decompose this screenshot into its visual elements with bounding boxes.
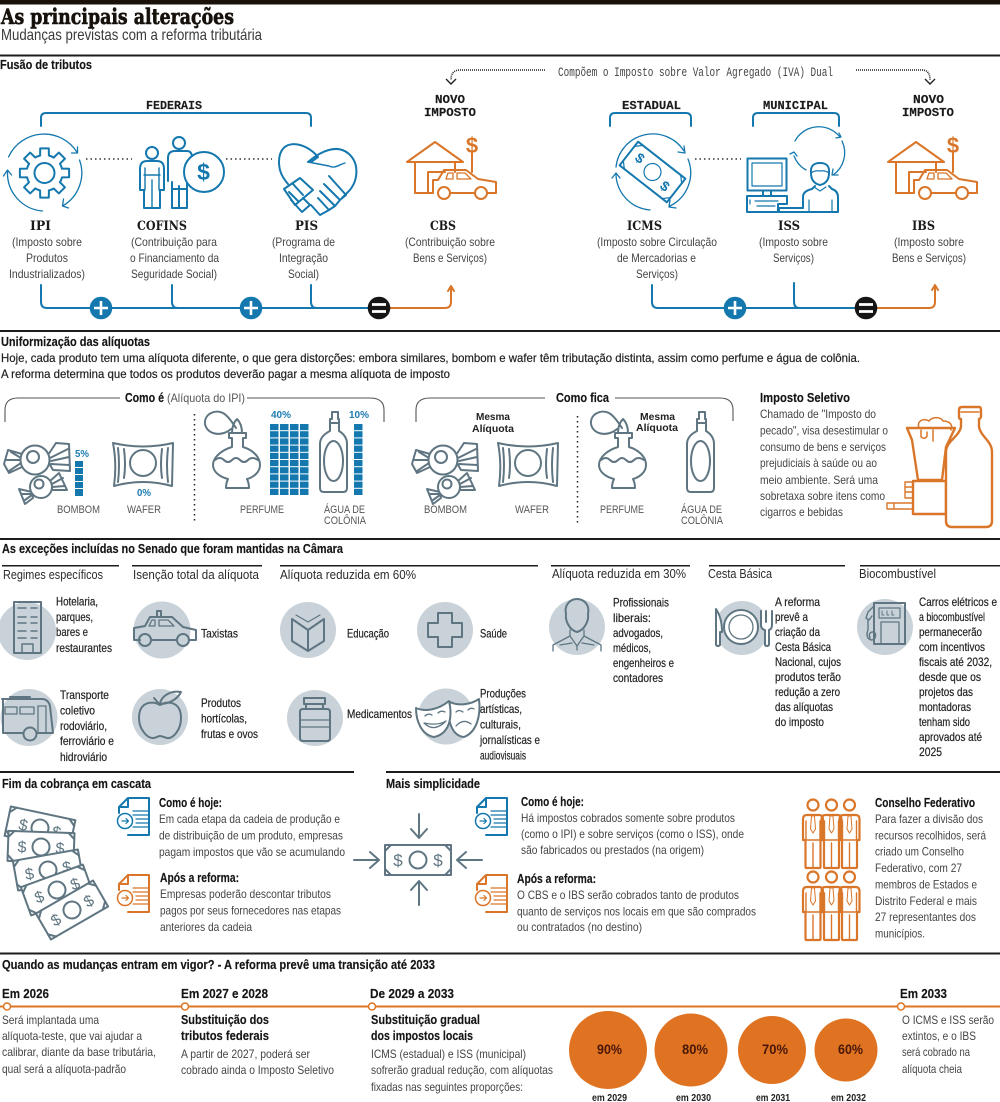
column: biocombustível <box>857 565 1000 759</box>
icon: fuel pump <box>866 603 905 644</box>
callout: IVA Dual with dotted arrows: Compõem o Imposto sobre Valor Agregado (IVA) Dual <box>558 66 833 80</box>
text: imposto seletivo: prejudiciais à saúde ou ao <box>760 456 877 470</box>
text: conselho federativo: Conselho Federativo <box>875 796 975 810</box>
text: produções <box>479 686 540 762</box>
text: imposto seletivo: cigarros e bebidas <box>760 505 843 519</box>
text: transporte: coletivo <box>60 704 95 718</box>
label: novo imposto CBS: IMPOSTO <box>424 106 476 120</box>
icon: wafer <box>113 443 173 486</box>
text: imposto seletivo <box>760 391 888 519</box>
text: biocombustível <box>919 595 997 759</box>
label: CBS: CBS <box>430 219 456 234</box>
text: educação: Educação <box>347 626 389 640</box>
text: conselho federativo: Distrito Federal e mais <box>875 894 977 908</box>
text: cesta básica: A reforma <box>775 595 820 609</box>
text: como é hoje: de distribuição de um produto, empresas <box>159 828 343 842</box>
icon: hotel building <box>14 602 41 653</box>
label: água de colônia como fica: ÁGUA DE <box>681 503 722 516</box>
panel: mais simplicidade <box>354 771 1000 940</box>
icon: heart handshake <box>279 144 356 215</box>
text: cesta básica: das alíquotas <box>775 700 833 714</box>
label: CBS <box>405 219 495 265</box>
label: novo imposto IBS: NOVO <box>913 93 944 107</box>
icon: wafer como fica <box>498 443 558 486</box>
label: CBS: Bens e Serviços) <box>413 251 487 265</box>
callout: IVA Dual with dotted arrows <box>446 66 935 84</box>
bracket: como é: Como é <box>125 391 164 405</box>
label: PIS: (Programa de <box>272 235 335 249</box>
icon: people with coin <box>140 137 224 208</box>
circle: 60% em 2032: 60% <box>838 1042 863 1057</box>
column: alíquota reduzida em 60%: Alíquota reduzida em 60% <box>280 567 416 582</box>
circle: 80% em 2030 <box>654 1014 728 1102</box>
panel: fim da cobrança em cascata <box>0 771 354 939</box>
label: PIS: PIS <box>295 219 318 234</box>
label: novo imposto CBS: NOVO <box>435 93 465 107</box>
icon: água de colônia como fica <box>687 412 714 492</box>
column: cesta básica <box>708 565 845 729</box>
panel: cronograma <box>0 958 1000 1102</box>
subtitle: Mudanças previstas com a reforma tributária <box>1 27 262 44</box>
step: de 2029 a 2033: De 2029 a 2033 <box>370 987 454 1001</box>
icon: stack of banknotes: $ <box>55 841 65 858</box>
bar: bombom 5% <box>75 448 90 496</box>
intro text: Hoje, cada produto tem uma alíquota diferente, o que gera distorções: embora similares, bombom e wafer têm tributação distinta, assim como perfume e água de colônia. <box>1 351 860 365</box>
text: transporte: hidroviário <box>60 750 107 764</box>
step: em 2026 <box>2 987 156 1076</box>
icon: blue document <box>118 798 149 835</box>
text: cesta básica: produtos terão <box>775 670 841 684</box>
text: como é hoje: (como o IPI) e sobre serviços (como o ISS), onde <box>521 827 744 841</box>
column: regimes específicos <box>0 565 119 764</box>
label: mesma alíquota direita: Alíquota <box>636 422 678 434</box>
step: de 2029 a 2033: Substituição gradual <box>371 1013 480 1027</box>
bar: água de colônia 10%: 10% <box>349 409 370 421</box>
label: ICMS: de Mercadorias e <box>617 251 696 265</box>
icon: stack of banknotes: $ <box>24 866 36 884</box>
label: COFINS: (Contribuição para <box>131 235 217 249</box>
label: mesma alíquota esquerda: Alíquota <box>472 423 514 435</box>
group: estadual bracket: ESTADUAL <box>622 99 681 113</box>
step: em 2027 e 2028: Substituição dos <box>181 1013 269 1027</box>
text: profissionais liberais: Profissionais <box>613 596 669 610</box>
icon: blue document <box>476 798 507 835</box>
text: como é hoje: são fabricados ou prestados (na origem) <box>521 843 704 857</box>
text: cesta básica: redução a zero <box>775 685 840 699</box>
label: ISS: ISS <box>778 219 800 234</box>
text: produtos hortícolas: Produtos <box>201 696 241 710</box>
text: cesta básica: prevê a <box>775 610 808 624</box>
text: transporte: Transporte <box>60 688 109 702</box>
text: profissionais liberais: advogados, <box>613 626 663 640</box>
step: em 2027 e 2028: Em 2027 e 2028 <box>181 987 268 1001</box>
icon: dollar on coin: $ <box>197 159 210 185</box>
text: cesta básica: criação da <box>775 625 820 639</box>
step: em 2027 e 2028: A partir de 2027, poderá ser <box>181 1047 310 1061</box>
text: cesta básica <box>775 595 841 729</box>
title: As principais alterações <box>0 4 234 29</box>
icon: stack of banknotes <box>5 806 108 939</box>
text: produções: culturais, <box>480 718 521 732</box>
step: em 2033: alíquota cheia <box>902 1062 962 1076</box>
label: novo imposto CBS <box>424 93 476 120</box>
text: imposto seletivo: consumo de bens e serviços <box>760 440 886 454</box>
label: wafer: WAFER <box>127 504 161 516</box>
text: produtos hortícolas <box>201 696 258 741</box>
icon: medicine bottle <box>300 698 330 741</box>
label: IPI <box>9 219 85 281</box>
label: IBS: IBS <box>912 219 935 234</box>
icon: banknote with converging arrows <box>354 814 482 905</box>
label: COFINS <box>130 219 219 281</box>
text: cesta básica: Nacional, cujos <box>775 655 841 669</box>
icon: bebida e cigarro <box>887 407 992 527</box>
icon: bombom <box>4 443 70 504</box>
column: isenção total <box>132 565 262 745</box>
label: wafer 0%: 0% <box>137 487 152 499</box>
text: após a reforma: pagos por seus fornecedores nas etapas <box>160 904 341 918</box>
icon: bombom como fica <box>412 443 478 504</box>
icon: IBS house and car <box>888 142 977 199</box>
text: cesta básica: Cesta Básica <box>775 640 831 654</box>
circle: 60% em 2032 <box>814 1018 878 1102</box>
step: em 2027 e 2028: tributos federais <box>181 1029 269 1043</box>
circle: 70% em 2031 <box>738 1016 806 1102</box>
group: federais bracket <box>41 99 311 126</box>
column: isenção total: Isenção total da alíquota <box>133 567 260 582</box>
icon: cross <box>428 613 462 647</box>
icon: rotating banknote <box>612 134 691 210</box>
text: hotelaria: bares e <box>56 625 88 639</box>
icon: apple <box>139 692 181 738</box>
text: hotelaria: restaurantes <box>56 641 112 655</box>
icon: book <box>292 615 324 651</box>
label: ICMS: (Imposto sobre Circulação <box>597 235 717 249</box>
label: COFINS: Seguridade Social) <box>131 267 217 281</box>
text: produtos hortícolas: frutas e ovos <box>201 727 258 741</box>
text: profissionais liberais: liberais: <box>613 611 651 625</box>
label: PIS: Integração <box>279 251 328 265</box>
label: IPI: Industrializados) <box>9 267 85 281</box>
step: em 2026: Será implantada uma <box>2 1013 99 1027</box>
group: estadual bracket <box>610 99 691 126</box>
text: imposto seletivo: meio ambiente. Será uma <box>760 473 878 487</box>
label: IPI: IPI <box>30 219 51 234</box>
bracket: como fica <box>416 391 733 422</box>
heading: cascata: Fim da cobrança em cascata <box>2 777 152 791</box>
label: bombom como fica: BOMBOM <box>424 504 467 516</box>
icon: stack of banknotes: $ <box>50 824 63 842</box>
icon: água de colônia <box>320 412 347 492</box>
label: mesma alíquota esquerda: Mesma <box>476 411 510 423</box>
bracket: como é: (Alíquota do IPI) <box>167 391 245 405</box>
text: transporte: rodoviário, <box>60 719 107 733</box>
label: IBS: (Imposto sobre <box>894 235 964 249</box>
label: IBS <box>892 219 966 265</box>
label: água de colônia <box>324 503 367 527</box>
text: conselho federativo: criado um Conselho <box>875 845 964 859</box>
text: cesta básica: do imposto <box>775 715 824 729</box>
text: taxistas: Taxistas <box>201 626 238 640</box>
text: profissionais liberais: médicos, <box>613 641 651 655</box>
heading: exceções: As exceções incluídas no Senado que foram mantidas na Câmara <box>2 542 344 556</box>
text: profissionais liberais: contadores <box>613 671 663 685</box>
icon: computer and worker <box>747 127 845 212</box>
text: transporte <box>60 688 114 764</box>
text: hotelaria: parques, <box>56 610 93 624</box>
icon: stack of banknotes: $ <box>61 859 73 877</box>
icon: stack of banknotes: $ <box>48 911 64 930</box>
bracket: como é <box>5 391 384 422</box>
text: biocombustível: com incentivos <box>919 640 985 654</box>
text: hotelaria: Hotelaria, <box>56 594 98 608</box>
label: CBS: (Contribuição sobre <box>405 235 495 249</box>
text: biocombustível: desde que os <box>919 670 981 684</box>
text: após a reforma: quanto de serviços nos locais em que são comprados <box>517 904 756 918</box>
text: imposto seletivo: pecado", visa desestimular o <box>760 424 888 438</box>
text: como é hoje: pagam impostos que vão se acumulando <box>159 845 345 859</box>
bar: bombom 5%: 5% <box>75 448 90 460</box>
bracket: como fica: Como fica <box>556 391 610 405</box>
text: conselho federativo: Federativo, com 27 <box>875 861 962 875</box>
icon: stack of banknotes: $ <box>68 875 83 894</box>
label: mesma alíquota direita: Mesma <box>640 411 675 423</box>
column: cesta básica: Cesta Básica <box>708 566 773 581</box>
text: conselho federativo: membros de Estados e <box>875 878 977 892</box>
text: conselho federativo <box>875 796 986 940</box>
label: ICMS <box>597 219 717 281</box>
text: profissionais liberais <box>613 596 674 685</box>
bar: perfume 40% <box>270 409 308 495</box>
label: água de colônia como fica <box>681 503 724 527</box>
text: biocombustível: montadoras <box>919 700 971 714</box>
column: alíquota reduzida em 60% <box>280 565 540 762</box>
heading: mais simplicidade: Mais simplicidade <box>386 777 480 791</box>
heading: uniformização: Uniformização das alíquotas <box>1 335 150 349</box>
text: como é hoje: Em cada etapa da cadeia de produção e <box>159 812 340 826</box>
label: PIS: Social) <box>288 267 319 281</box>
text: biocombustível: aprovados até <box>919 730 982 744</box>
column: alíquota reduzida em 30%: Alíquota reduzida em 30% <box>552 566 686 581</box>
label: ICMS: Serviços) <box>636 267 678 281</box>
intro text: A reforma determina que todos os produtos deverão pagar a mesma alíquota de imposto <box>1 367 450 381</box>
step: de 2029 a 2033: sofrerão gradual redução, com alíquotas <box>371 1063 553 1077</box>
text: profissionais liberais: engenheiros e <box>613 656 674 670</box>
icon: rotating banknote: $ <box>657 177 673 195</box>
step: em 2033: extintos, e o IBS <box>902 1029 976 1043</box>
label: mesma alíquota direita <box>636 411 678 434</box>
bar: água de colônia 10% <box>349 409 370 495</box>
circle: 70% em 2031: 70% <box>762 1042 788 1057</box>
group: municipal bracket <box>753 99 839 126</box>
text: biocombustível: projetos das <box>919 685 973 699</box>
text: produções: jornalísticas e <box>479 733 540 747</box>
text: como é hoje <box>159 796 345 859</box>
step: de 2029 a 2033 <box>370 987 553 1094</box>
icon: perfume como fica <box>591 412 646 488</box>
panel: uniformização das alíquotas <box>1 335 992 527</box>
step: de 2029 a 2033: dos impostos locais <box>371 1029 473 1043</box>
circle: 90% em 2029 <box>569 1011 647 1102</box>
step: de 2029 a 2033: fixadas nas seguintes proporções: <box>371 1080 523 1094</box>
label: mesma alíquota esquerda <box>472 411 514 435</box>
top bar <box>0 0 1000 4</box>
flow: federais sum <box>41 285 454 319</box>
icon: taxi <box>134 611 196 646</box>
step: em 2033: Em 2033 <box>900 987 947 1001</box>
icon: plate and cutlery <box>716 609 772 646</box>
label: PIS <box>272 219 335 281</box>
step: em 2026: calibrar, diante da base tributária, <box>2 1045 156 1059</box>
text: imposto seletivo: Imposto Seletivo <box>760 391 850 405</box>
label: ISS: (Imposto sobre <box>759 235 828 249</box>
label: IPI: (Imposto sobre <box>12 235 82 249</box>
icon: stack of banknotes: $ <box>33 888 47 907</box>
icon: bus <box>2 697 53 740</box>
icon: stack of banknotes: $ <box>17 817 29 835</box>
text: após a reforma: ou contratados (no destino) <box>517 920 642 934</box>
text: como é hoje <box>521 795 744 857</box>
icon: gear <box>4 134 82 211</box>
heading: cronograma: Quando as mudanças entram em vigor? - A reforma prevê uma transição até 2033 <box>2 958 435 972</box>
icon: orange document <box>118 875 149 912</box>
text: como é hoje: Há impostos cobrados somente sobre produtos <box>521 811 735 825</box>
text: imposto seletivo: Chamado de "Imposto do <box>760 407 876 421</box>
label: perfume como fica: PERFUME <box>600 504 644 516</box>
label: ISS <box>759 219 828 265</box>
text: saúde: Saúde <box>480 626 507 640</box>
label: novo imposto IBS <box>902 93 954 120</box>
icon: conselho federativo people <box>803 800 860 940</box>
text: como é hoje: Como é hoje: <box>159 796 222 810</box>
step: em 2026: Em 2026 <box>2 987 49 1001</box>
step: em 2033 <box>900 987 994 1076</box>
icon: stack of banknotes: $ <box>81 892 97 911</box>
group: municipal bracket: MUNICIPAL <box>763 99 828 113</box>
group: federais bracket: FEDERAIS <box>146 99 202 113</box>
intro text <box>1 351 860 381</box>
circle: 80% em 2030: 80% <box>682 1042 708 1057</box>
text: após a reforma <box>517 872 756 934</box>
text: biocombustível: tenham sido <box>919 715 970 729</box>
text: hotelaria <box>56 594 112 655</box>
icon: professional <box>553 599 601 651</box>
column: biocombustível: Biocombustível <box>859 566 936 581</box>
icon: CBS house and car <box>407 142 496 199</box>
text: após a reforma: Após a reforma: <box>160 871 239 885</box>
icon: rotating banknote: $ <box>632 149 648 167</box>
text: produções: Produções <box>480 686 526 700</box>
label: perfume: PERFUME <box>240 504 284 516</box>
text: conselho federativo: Para fazer a divisão dos <box>875 812 983 826</box>
label: água de colônia: COLÔNIA <box>324 514 367 527</box>
label: bombom: BOMBOM <box>57 504 100 516</box>
text: conselho federativo: municípios. <box>875 926 925 940</box>
icon: theatre masks <box>416 699 479 737</box>
step: em 2033: será cobrado na <box>902 1045 970 1059</box>
circle: 90% em 2029: 90% <box>597 1042 622 1057</box>
label: wafer como fica: WAFER <box>515 504 549 516</box>
text: biocombustível: permanecerão <box>919 625 982 639</box>
timeline line <box>0 1003 1000 1010</box>
label: ISS: Serviços) <box>773 251 814 265</box>
flow: estadual and municipal sum <box>652 283 938 319</box>
label: COFINS: o Financiamento da <box>130 251 219 265</box>
text: produções: audiovisuais <box>480 748 526 762</box>
icon: stack of banknotes: $ <box>17 839 27 856</box>
icon: dollar sign CBS: $ <box>466 133 478 158</box>
label: IBS: Bens e Serviços) <box>892 251 966 265</box>
column: regimes específicos: Regimes específicos <box>3 567 103 582</box>
icon: banknote with converging arrows: $ <box>393 851 403 870</box>
panel: exceções <box>0 542 1000 764</box>
text: após a reforma: Empresas poderão descontar tributos <box>160 887 331 901</box>
icon: orange document <box>476 875 507 912</box>
label: IPI: Produtos <box>26 251 68 265</box>
label: novo imposto IBS: IMPOSTO <box>902 106 954 120</box>
text: após a reforma: Após a reforma: <box>517 872 596 886</box>
panel: fusão de tributos <box>0 58 977 319</box>
step: em 2027 e 2028 <box>181 987 334 1077</box>
column: alíquota reduzida em 30% <box>549 565 690 685</box>
text: produções: artísticas, <box>480 702 522 716</box>
text: biocombustível: 2025 <box>919 745 942 759</box>
text: após a reforma: anteriores da cadeia <box>160 920 252 934</box>
text: imposto seletivo: sobretaxa sobre itens como <box>760 489 885 503</box>
step: em 2026: alíquota-teste, que vai ajudar a <box>2 1029 142 1043</box>
text: após a reforma: O CBS e o IBS serão cobrados tanto de produtos <box>517 888 739 902</box>
label: água de colônia como fica: COLÔNIA <box>681 514 724 527</box>
icon: banknote with converging arrows: $ <box>433 851 443 870</box>
icon: perfume <box>205 412 260 488</box>
text: produtos hortícolas: hortícolas, <box>201 712 247 726</box>
text: transporte: ferroviário e <box>60 734 114 748</box>
label: COFINS: COFINS <box>137 219 187 234</box>
text: conselho federativo: 27 representantes dos <box>875 910 976 924</box>
step: em 2026: qual será a alíquota-padrão <box>2 1062 126 1076</box>
label: ICMS: ICMS <box>627 219 662 234</box>
text: como é hoje: Como é hoje: <box>521 795 584 809</box>
heading: fusão de tributos: Fusão de tributos <box>0 58 92 72</box>
step: em 2027 e 2028: cobrado ainda o Imposto Seletivo <box>181 1063 334 1077</box>
step: de 2029 a 2033: ICMS (estadual) e ISS (municipal) <box>371 1047 526 1061</box>
text: medicamentos: Medicamentos <box>347 707 412 721</box>
label: água de colônia: ÁGUA DE <box>324 503 365 516</box>
bar: perfume 40%: 40% <box>271 409 292 421</box>
text: após a reforma <box>160 871 341 934</box>
icon: dollar sign IBS: $ <box>947 133 959 158</box>
